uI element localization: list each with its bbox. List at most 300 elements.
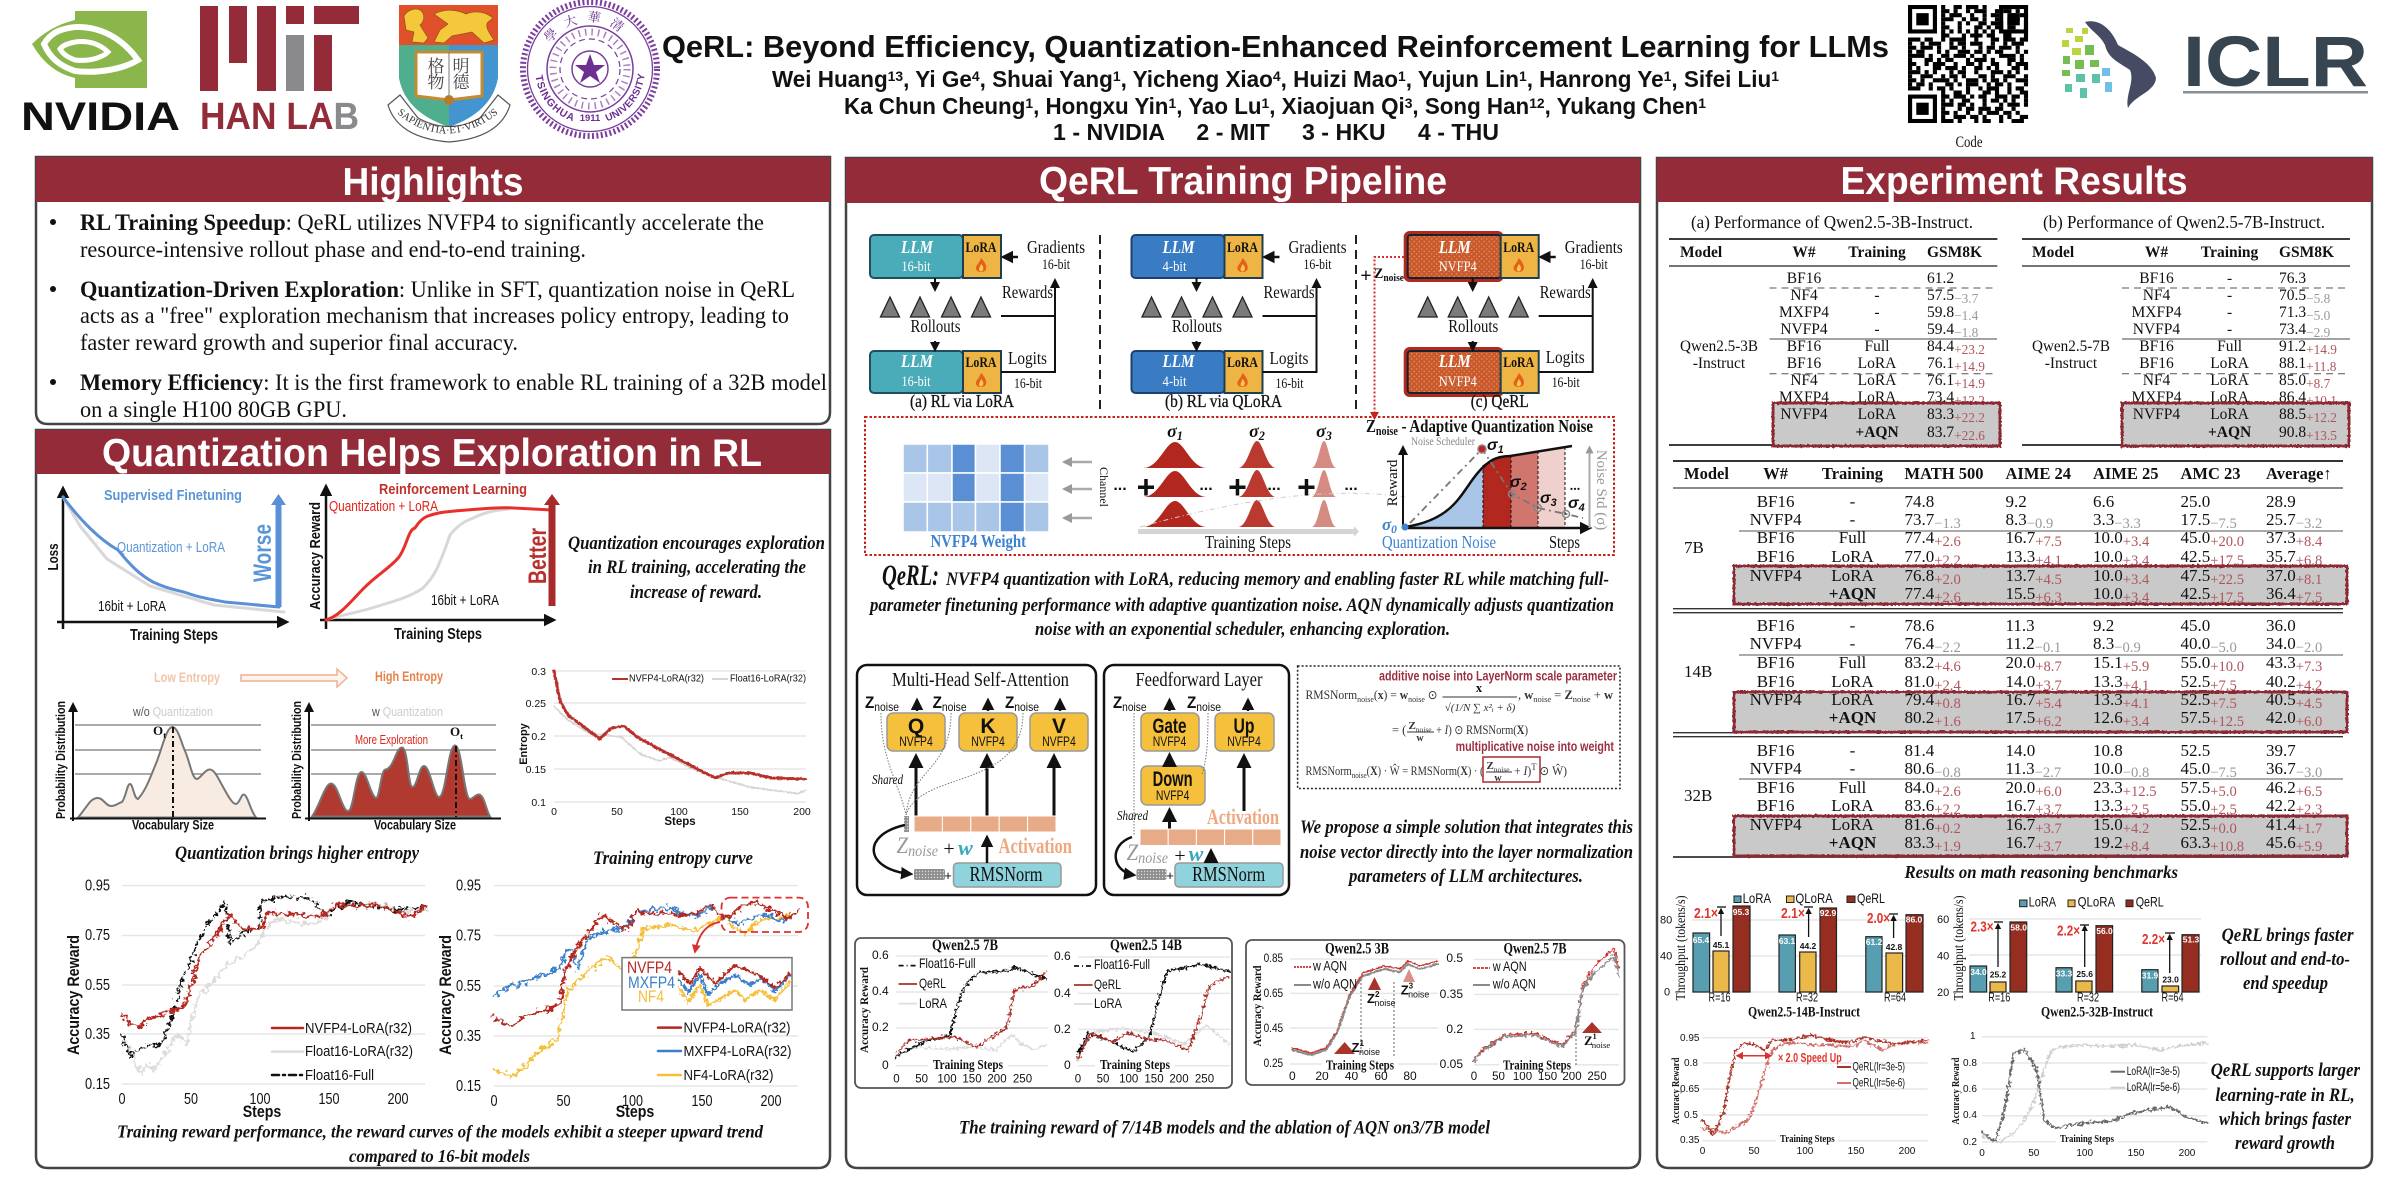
group: 7B rows: 13.7 bbox=[2006, 566, 2036, 585]
chart: Qwen2.5 14B: 150 bbox=[1144, 1074, 1164, 1086]
chart: QeRL learning rate: 0 bbox=[1700, 1146, 1706, 1157]
bar chart: Qwen2.5-14B throughput: 63.1 bbox=[1779, 936, 1796, 946]
diagram: feedforward layer: Znoise bbox=[1113, 693, 1146, 714]
group: 7B rows: +7.5 bbox=[2296, 590, 2322, 606]
diagram: RL via QLoRA: 4-bit bbox=[1162, 374, 1186, 390]
group: 32B rows: 36.7 bbox=[2266, 759, 2296, 778]
group: 7B rows: BF16 bbox=[1757, 492, 1794, 511]
text: we propose: parameters of LLM architectures. bbox=[1347, 867, 1583, 887]
gaussians: sigma distributions: σ1 bbox=[1167, 421, 1183, 443]
group: 32B rows: +3.7 bbox=[2035, 839, 2062, 855]
diagram: multi-head self-attention: + bbox=[943, 838, 955, 860]
chart: high entropy distribution: Probability Distribution bbox=[289, 701, 304, 819]
chart: Qwen2.5 14B: 100 bbox=[1119, 1074, 1138, 1086]
group: 7B rows: 35.7 bbox=[2266, 547, 2296, 566]
chart: high entropy distribution bbox=[289, 701, 501, 832]
logo: Tsinghua seal: 學大華清 bbox=[544, 10, 624, 41]
table a: Qwen2.5-3B: W# bbox=[1792, 244, 1816, 261]
table b: Qwen2.5-7B: 71.3 bbox=[2279, 304, 2306, 321]
group: 14B rows: BF16 bbox=[1757, 672, 1794, 691]
formula box: x bbox=[1476, 681, 1483, 695]
chart: accuracy reward NVFP4 vs float16: 0.95 bbox=[85, 878, 110, 894]
formula box: + I) ⊙ RMSNorm(X) bbox=[1436, 723, 1528, 737]
diagram: feedforward layer: NVFP4 bbox=[1156, 787, 1190, 803]
chart: high entropy distribution: w Quantization bbox=[371, 704, 443, 719]
chart: Qwen2.5 7B AQN: 0 bbox=[1471, 1071, 1477, 1083]
group: 7B rows: +3.4 bbox=[2123, 572, 2150, 588]
group: 7B rows: +2.6 bbox=[1934, 590, 1961, 606]
group: 32B rows: BF16 bbox=[1757, 796, 1794, 815]
group: 32B rows: 81.6 bbox=[1904, 815, 1934, 834]
group: 32B rows: −7.5 bbox=[2210, 765, 2237, 781]
chart: training entropy curve: 0 bbox=[551, 806, 557, 818]
diagram: multi-head self-attention: Znoise bbox=[865, 693, 899, 714]
group: 32B rows: +1.9 bbox=[1934, 839, 1961, 855]
table b: Qwen2.5-7B: +14.9 bbox=[2306, 342, 2337, 357]
caption: training reward performance bbox=[117, 1121, 764, 1166]
table a: Qwen2.5-3B: LoRA bbox=[1858, 372, 1897, 389]
chart: Qwen2.5 7B: 0 bbox=[893, 1074, 900, 1086]
chart: accuracy reward bit formats bbox=[436, 878, 808, 1121]
chart: Qwen2.5 7B: LoRA bbox=[919, 995, 948, 1011]
table b: Qwen2.5-7B: NF4 bbox=[2143, 372, 2171, 389]
chart: accuracy reward NVFP4 vs float16: Steps bbox=[243, 1102, 281, 1121]
table a: Qwen2.5-3B: 76.1 bbox=[1927, 372, 1954, 389]
group: 32B rows: Full bbox=[1839, 778, 1866, 797]
group: 7B rows: 36.4 bbox=[2266, 584, 2296, 603]
group: 7B rows: 76.8 bbox=[1904, 566, 1934, 585]
chart: accuracy reward bit formats: 0 bbox=[490, 1093, 498, 1110]
group: 14B rows: +4.1 bbox=[2123, 678, 2149, 694]
text: quantization encourages exploration: increase of reward. bbox=[630, 582, 762, 603]
group: 32B rows: 39.7 bbox=[2266, 741, 2296, 760]
formula box: RMSNormnoise(X) · Ŵ = RMSNorm(X) · ( bbox=[1306, 764, 1484, 780]
table a: Qwen2.5-3B: +14.9 bbox=[1954, 359, 1985, 374]
text: quantization encourages exploration: Quantization encourages exploration bbox=[568, 533, 825, 554]
diagram: RL via QLoRA: Rollouts bbox=[1172, 316, 1222, 336]
formula box: = ( bbox=[1392, 723, 1406, 737]
diagram: RL via LoRA: LoRA bbox=[966, 355, 997, 371]
chart: Qwen2.5 7B: 150 bbox=[962, 1074, 982, 1086]
bullet: quantization-driven exploration: faster reward growth and superior final accuracy. bbox=[80, 330, 518, 355]
group: 14B rows: 34.0 bbox=[2266, 634, 2296, 653]
diagram: RL via LoRA: 16-bit bbox=[1042, 257, 1070, 273]
group: 7B rows: 77.4 bbox=[1904, 528, 1935, 547]
gaussians: sigma distributions: ... bbox=[1199, 477, 1213, 494]
diagram: feedforward layer: + bbox=[1174, 845, 1186, 867]
group: 32B rows: 81.4 bbox=[1904, 741, 1935, 760]
diagram: QeRL: LoRA bbox=[1503, 355, 1535, 371]
group: 32B rows: - bbox=[1850, 741, 1856, 760]
group: 32B rows: +5.9 bbox=[2296, 839, 2322, 855]
chart: supervised finetuning loss: Training Steps bbox=[130, 627, 218, 644]
group: 7B rows: +8.4 bbox=[2296, 534, 2323, 550]
logo: NVIDIA bbox=[21, 11, 180, 139]
bar chart: Qwen2.5-32B throughput: 33.3 bbox=[2056, 969, 2073, 979]
chart: Qwen2.5 7B AQN: 50 bbox=[1492, 1071, 1505, 1083]
chart: training entropy curve: 150 bbox=[731, 806, 749, 818]
group: 14B rows: 40.2 bbox=[2266, 672, 2296, 691]
inset legend: NVFP4 bbox=[627, 958, 672, 977]
table b: Qwen2.5-7B: W# bbox=[2145, 244, 2168, 261]
group: 14B rows: 52.5 bbox=[2180, 690, 2210, 709]
label: plus Z noise: Znoise bbox=[1374, 266, 1404, 284]
table b: Qwen2.5-7B: 91.2 bbox=[2279, 338, 2306, 355]
table b: Qwen2.5-7B: -Instruct bbox=[2045, 355, 2098, 372]
chart: Qwen2.5 3B: 0.25 bbox=[1264, 1056, 1283, 1070]
table a: Qwen2.5-3B: −1.8 bbox=[1954, 325, 1979, 340]
bar chart: Qwen2.5-14B throughput: 2.0× bbox=[1867, 910, 1890, 927]
chart: Qwen2.5 7B AQN: Qwen2.5 7B bbox=[1504, 941, 1566, 958]
table a: Qwen2.5-3B: - bbox=[1874, 321, 1880, 338]
diagram: RL via QLoRA: 4-bit bbox=[1162, 259, 1186, 275]
group: 14B rows: 11.3 bbox=[2006, 616, 2035, 635]
diagram: feedforward layer: RMSNorm bbox=[1192, 862, 1265, 886]
chart: reinforcement learning reward: 16bit + LoRA bbox=[431, 592, 499, 609]
group: 7B rows: 10.0 bbox=[2093, 547, 2123, 566]
chart: training entropy curve: 100 bbox=[670, 806, 688, 818]
chart: accuracy reward NVFP4 vs float16: 0.55 bbox=[85, 977, 110, 994]
group: 14B rows: 11.2 bbox=[2006, 634, 2035, 653]
chart: accuracy reward bit formats: 0.35 bbox=[456, 1028, 481, 1045]
chart: LoRA learning rate: LoRA(lr=3e-5) bbox=[2127, 1064, 2180, 1078]
group: 14B rows: 43.3 bbox=[2266, 653, 2296, 672]
chart: LoRA learning rate: LoRA(lr=5e-6) bbox=[2127, 1080, 2180, 1094]
diagram: RL via LoRA: LLM bbox=[900, 351, 934, 371]
diagram: RL via LoRA: 16-bit bbox=[1014, 376, 1042, 392]
group: 32B rows: 84.0 bbox=[1904, 778, 1934, 797]
formula box bbox=[1298, 666, 1620, 788]
heading: QeRL training pipeline: QeRL Training Pipeline bbox=[1039, 160, 1447, 203]
diagram: RL via LoRA: 16-bit bbox=[902, 259, 930, 275]
group: 7B rows: +20.0 bbox=[2210, 534, 2244, 550]
bullet: memory efficiency: on a single H100 80GB GPU. bbox=[80, 397, 347, 422]
chart: accuracy reward NVFP4 vs float16: 0.75 bbox=[85, 927, 110, 944]
table a: Qwen2.5-3B: −3.7 bbox=[1954, 291, 1979, 306]
group: 7B rows: +AQN bbox=[1829, 584, 1877, 603]
chart: accuracy reward bit formats: MXFP4-LoRA(r32) bbox=[684, 1043, 792, 1060]
diagram: multi-head self-attention: Znoise bbox=[896, 833, 938, 860]
table b: Qwen2.5-7B: +11.8 bbox=[2306, 359, 2337, 374]
chart: training entropy curve: 0.2 bbox=[531, 731, 546, 743]
entropy arrow and labels bbox=[154, 668, 443, 687]
diagram: multi-head self-attention: K bbox=[980, 715, 996, 738]
chart: LoRA learning rate: 0.8 bbox=[1963, 1058, 1977, 1069]
heading: experiment results: Experiment Results bbox=[1840, 160, 2188, 203]
bar chart: Qwen2.5-14B throughput: 80 bbox=[1660, 914, 1672, 926]
chart: reinforcement learning reward: Quantization + LoRA bbox=[329, 498, 438, 515]
diagram: RL via LoRA: LoRA bbox=[966, 240, 997, 256]
chart: Qwen2.5 14B: Qwen2.5 14B bbox=[1110, 937, 1182, 954]
chart: noise scheduler: Quantization Noise bbox=[1382, 532, 1496, 552]
QR caption: Code bbox=[1956, 134, 1982, 151]
formula box: + I)T ⊙ Ŵ) bbox=[1514, 762, 1567, 778]
group: 14B rows: +2.4 bbox=[1934, 678, 1961, 694]
bar chart: Qwen2.5-32B throughput: 40 bbox=[1937, 950, 1949, 962]
chart: LoRA learning rate: 0.6 bbox=[1963, 1084, 1977, 1095]
group: 7B rows: NVFP4 bbox=[1750, 566, 1802, 585]
diagram: multi-head self-attention: Multi-Head Self-Attention bbox=[892, 669, 1069, 691]
chart: low entropy distribution: w/o Quantization bbox=[132, 704, 213, 719]
chart: Qwen2.5 14B: QeRL bbox=[1094, 976, 1121, 992]
chart: QeRL learning rate: × 2.0 Speed Up bbox=[1778, 1051, 1842, 1065]
bullet: RL training speedup: RL Training Speedup: QeRL utilizes NVFP4 to significantly accelerate the bbox=[80, 210, 764, 235]
group: 14B rows: +6.0 bbox=[2296, 714, 2322, 730]
chart: noise scheduler: σ1 bbox=[1487, 437, 1504, 456]
chart: noise scheduler: Noise Std (σ) bbox=[1593, 450, 1609, 530]
table b: Qwen2.5-7B: Qwen2.5-7B bbox=[2032, 338, 2110, 355]
chart: QeRL learning rate: QeRL(lr=5e-6) bbox=[1852, 1076, 1905, 1090]
inset legend: MXFP4 bbox=[628, 973, 675, 992]
gaussians: sigma distributions: + bbox=[1137, 469, 1155, 505]
group: 7B rows: 7B bbox=[1684, 538, 1704, 557]
highlight: NVFP4 7B: +AQN bbox=[2208, 424, 2251, 441]
bar chart: Qwen2.5-32B throughput: R=64 bbox=[2162, 991, 2184, 1005]
chart: Qwen2.5 14B: 0.2 bbox=[1054, 1022, 1071, 1036]
diagram: QeRL: (c) QeRL bbox=[1471, 391, 1529, 412]
group: 32B rows: −2.7 bbox=[2035, 765, 2061, 781]
chart: LoRA learning rate bbox=[1951, 1031, 2207, 1159]
chart: LoRA learning rate: Accuracy Reward bbox=[1951, 1057, 1962, 1124]
chart: Qwen2.5 3B: 0 bbox=[1289, 1069, 1296, 1083]
text: quantization encourages exploration bbox=[568, 533, 825, 603]
group: 32B rows: +10.8 bbox=[2210, 839, 2244, 855]
chart: Qwen2.5 7B: QeRL bbox=[919, 975, 946, 991]
bullet: RL training speedup bbox=[50, 210, 764, 262]
group: 32B rows: 52.5 bbox=[2180, 815, 2210, 834]
bullet: memory efficiency: Memory Efficiency: It is the first framework to enable RL training of a 32B model bbox=[80, 370, 827, 395]
chart: Qwen2.5 7B: 0.6 bbox=[872, 948, 889, 962]
highlight: NVFP4 3B: +AQN bbox=[1855, 424, 1899, 441]
chart: Qwen2.5 7B AQN: 0.35 bbox=[1440, 987, 1463, 1001]
group: 32B rows: −0.8 bbox=[1934, 765, 1961, 781]
bar chart: Qwen2.5-14B throughput: 2.1× bbox=[1694, 905, 1718, 922]
chart: Qwen2.5 3B: 0.45 bbox=[1264, 1021, 1283, 1035]
chart: Qwen2.5 3B: Z2 noise bbox=[1367, 990, 1396, 1008]
table a: Qwen2.5-3B: GSM8K bbox=[1927, 244, 1982, 261]
diagram: RL via QLoRA: (b) RL via QLoRA bbox=[1165, 391, 1282, 412]
chart: LoRA learning rate: 100 bbox=[2076, 1148, 2093, 1159]
chart: noise scheduler bbox=[1366, 416, 1609, 552]
bar chart: Qwen2.5-32B throughput: Qwen2.5-32B-Instruct bbox=[2041, 1005, 2153, 1021]
diagram: RL via QLoRA: Rewards bbox=[1264, 282, 1314, 302]
group: 32B rows: 13.3 bbox=[2093, 796, 2123, 815]
group: 7B rows: +3.4 bbox=[2123, 590, 2150, 606]
table a: Qwen2.5-3B: BF16 bbox=[1787, 270, 1821, 287]
chart: accuracy reward NVFP4 vs float16: 200 bbox=[388, 1091, 409, 1108]
text: faster rollout: end speedup bbox=[2243, 974, 2328, 994]
highlight: NVFP4 3B: +22.2 bbox=[1954, 410, 1985, 425]
arrows: channel bbox=[1064, 462, 1111, 518]
table b: Qwen2.5-7B: BF16 bbox=[2139, 270, 2174, 287]
chart: Qwen2.5 7B AQN: Z1 noise bbox=[1584, 1032, 1610, 1050]
group: 32B rows: +5.0 bbox=[2210, 784, 2237, 800]
table a: Qwen2.5-3B: 84.4 bbox=[1927, 338, 1954, 355]
group: 7B rows: 25.0 bbox=[2180, 492, 2210, 511]
chart: reinforcement learning reward: Better bbox=[524, 528, 552, 584]
group: 32B rows: +2.3 bbox=[2296, 802, 2322, 818]
highlight: NVFP4 3B: +22.6 bbox=[1954, 428, 1985, 443]
group: 14B rows: Full bbox=[1839, 653, 1866, 672]
table b: Qwen2.5-7B: Model bbox=[2032, 244, 2075, 261]
logo: Tsinghua seal: TSINGHUA bbox=[536, 74, 573, 122]
chart: accuracy reward bit formats: 0.95 bbox=[456, 878, 481, 894]
table: math benchmarks: Training bbox=[1822, 464, 1884, 483]
gaussians: sigma distributions: ... bbox=[1113, 477, 1127, 494]
group: 7B rows: - bbox=[1850, 492, 1856, 511]
group: 7B rows: +7.5 bbox=[2035, 534, 2062, 550]
group: 32B rows: 46.2 bbox=[2266, 778, 2296, 797]
group: 7B rows: 42.5 bbox=[2180, 584, 2210, 603]
table a: Qwen2.5-3B: 73.4 bbox=[1927, 389, 1954, 406]
group: 14B rows: 13.3 bbox=[2093, 690, 2123, 709]
group: 32B rows: 10.8 bbox=[2093, 741, 2123, 760]
diagram: RL via LoRA: Gradients bbox=[1027, 237, 1085, 257]
chart: high entropy distribution: Vocabulary Size bbox=[374, 818, 456, 832]
chart: Qwen2.5 7B AQN: 200 bbox=[1562, 1071, 1582, 1083]
formula box: Znoise bbox=[1408, 720, 1432, 734]
chart: QeRL learning rate: Accuracy Reward bbox=[1671, 1057, 1682, 1124]
formula box: multiplicative noise into weight bbox=[1456, 739, 1614, 754]
highlight: NVFP4 3B: NVFP4 bbox=[1780, 406, 1828, 423]
diagram: QeRL: 16-bit bbox=[1552, 375, 1580, 391]
chart: accuracy reward bit formats: 200 bbox=[760, 1093, 782, 1110]
group: 14B rows: 9.2 bbox=[2093, 616, 2114, 635]
group: 32B rows: 15.0 bbox=[2093, 815, 2123, 834]
chart: accuracy reward NVFP4 vs float16: NVFP4-LoRA(r32) bbox=[305, 1020, 412, 1037]
group: 7B rows: 77.4 bbox=[1904, 584, 1935, 603]
group: 7B rows: 77.0 bbox=[1904, 547, 1934, 566]
table: math benchmarks: AIME 24 bbox=[2006, 464, 2071, 483]
chart: high entropy distribution: More Exploration bbox=[355, 732, 428, 747]
diagram: feedforward layer: + bbox=[1166, 868, 1174, 883]
chart: Qwen2.5 3B: Z1 noise bbox=[1352, 1039, 1380, 1057]
bar chart: Qwen2.5-32B throughput: 51.3 bbox=[2183, 935, 2200, 945]
diagram: RL via QLoRA: LoRA bbox=[1227, 240, 1258, 256]
inset legend: NF4 bbox=[638, 987, 664, 1006]
diagram: feedforward layer: Feedforward Layer bbox=[1136, 669, 1263, 691]
chart: supervised finetuning loss: Loss bbox=[45, 544, 62, 570]
bar chart: Qwen2.5-14B throughput: R=32 bbox=[1796, 991, 1818, 1005]
gaussians: sigma distributions: σ3 bbox=[1316, 421, 1332, 443]
chart: training entropy curve: 0.25 bbox=[526, 698, 546, 710]
diagram: QeRL: Gradients bbox=[1565, 237, 1623, 257]
table b: Qwen2.5-7B: +8.7 bbox=[2306, 376, 2331, 391]
diagram: feedforward layer: Activation bbox=[1207, 804, 1279, 829]
group: 32B rows: 45.0 bbox=[2180, 759, 2210, 778]
chart: Qwen2.5 14B: 0.4 bbox=[1054, 986, 1071, 1000]
chart: QeRL learning rate: 0.65 bbox=[1680, 1084, 1700, 1095]
group: 14B rows: +8.7 bbox=[2035, 659, 2062, 675]
table a: Qwen2.5-3B: Qwen2.5-3B bbox=[1680, 338, 1758, 355]
group: 32B rows: +3.7 bbox=[2035, 802, 2062, 818]
group: 32B rows: 83.6 bbox=[1904, 796, 1934, 815]
chart: accuracy reward bit formats: Accuracy Reward bbox=[436, 935, 455, 1055]
table b: Qwen2.5-7B: MXFP4 bbox=[2132, 389, 2182, 406]
authors bbox=[772, 66, 1779, 145]
authors: 1 - NVIDIA 2 - MIT 3 - HKU 4 - THU bbox=[1053, 119, 1499, 145]
table b: Qwen2.5-7B: LoRA bbox=[2210, 355, 2250, 372]
table a: Qwen2.5-3B: NF4 bbox=[1790, 372, 1818, 389]
bar chart: Qwen2.5-14B throughput: Throughput (tokens/s) bbox=[1674, 895, 1689, 1000]
chart: LoRA learning rate: 0.2 bbox=[1963, 1137, 1977, 1148]
formula box: Znoise bbox=[1486, 760, 1510, 774]
chart: accuracy reward bit formats: NF4-LoRA(r32) bbox=[684, 1067, 774, 1084]
group: 7B rows: +4.5 bbox=[2035, 572, 2062, 588]
text: QeRL description: noise with an exponential scheduler, enhancing exploration. bbox=[1035, 620, 1450, 640]
group: 32B rows: 41.4 bbox=[2266, 815, 2296, 834]
group: 14B rows: +4.2 bbox=[2296, 678, 2322, 694]
group: 32B rows: 57.5 bbox=[2180, 778, 2210, 797]
text: larger learning rate: learning-rate in RL, bbox=[2215, 1086, 2355, 1106]
group: 7B rows: 8.3 bbox=[2006, 510, 2027, 529]
group: 14B rows: LoRA bbox=[1831, 690, 1874, 709]
group: 7B rows: 3.3 bbox=[2093, 510, 2114, 529]
chart: LoRA learning rate: 150 bbox=[2128, 1148, 2145, 1159]
chart: noise scheduler: Noise Scheduler bbox=[1411, 434, 1475, 448]
group: 14B rows: 12.6 bbox=[2093, 708, 2123, 727]
chart: noise scheduler: Reward bbox=[1385, 459, 1401, 506]
group: 32B rows: - bbox=[1850, 759, 1856, 778]
diagram: multi-head self-attention: V bbox=[1052, 715, 1066, 738]
group: 32B rows: 32B bbox=[1684, 786, 1712, 805]
text: QeRL description: NVFP4 quantization with LoRA, reducing memory and enabling faster RL while matching full- bbox=[945, 570, 1609, 590]
bar chart: Qwen2.5-32B throughput: R=32 bbox=[2077, 991, 2099, 1005]
text: larger learning rate: which brings faster bbox=[2219, 1110, 2352, 1130]
table b: Qwen2.5-7B: 73.4 bbox=[2279, 321, 2306, 338]
diagram: feedforward layer: Znoise bbox=[1127, 840, 1168, 867]
table b: Qwen2.5-7B: 88.1 bbox=[2279, 355, 2306, 372]
group: 32B rows: 42.2 bbox=[2266, 796, 2296, 815]
logo: ICLR bbox=[2062, 21, 2368, 108]
group: 14B rows: 36.0 bbox=[2266, 616, 2296, 635]
diagram: QeRL: 16-bit bbox=[1580, 257, 1608, 273]
diagram: feedforward layer: Znoise bbox=[1187, 693, 1221, 714]
group: 7B rows: +6.3 bbox=[2035, 590, 2062, 606]
group: 32B rows: 11.3 bbox=[2006, 759, 2035, 778]
diagram: multi-head self-attention: Znoise bbox=[933, 693, 967, 714]
chart: accuracy reward bit formats: Steps bbox=[616, 1102, 654, 1121]
table a: Qwen2.5-3B: Model bbox=[1680, 244, 1723, 261]
text: faster rollout: QeRL brings faster bbox=[2222, 926, 2354, 946]
group: 14B rows: 76.4 bbox=[1904, 634, 1935, 653]
chart: Qwen2.5 7B: 250 bbox=[1013, 1074, 1032, 1086]
group: 14B rows: 17.5 bbox=[2006, 708, 2035, 727]
group: 7B rows: +3.4 bbox=[2123, 553, 2150, 569]
group: 32B rows bbox=[1684, 741, 2347, 856]
table a: Qwen2.5-3B: NF4 bbox=[1790, 287, 1818, 304]
bar chart: Qwen2.5-32B throughput: 25.2 bbox=[1990, 970, 2007, 980]
diagram: RL via QLoRA: 16-bit bbox=[1276, 376, 1304, 392]
panel: training reward 7B and 14B bbox=[855, 937, 1232, 1088]
formula box: √(1/N ∑ x²ᵢ + δ) bbox=[1445, 702, 1516, 714]
chart: Qwen2.5 14B: Training Steps bbox=[1100, 1057, 1170, 1072]
chart: supervised finetuning loss: 16bit + LoRA bbox=[98, 598, 166, 615]
table a: Qwen2.5-3B: NVFP4 bbox=[1780, 321, 1828, 338]
caption: training reward performance: Training reward performance, the reward curves of the models exhibit a steeper upward trend bbox=[117, 1121, 764, 1141]
authors: Wei Huang13, Yi Ge4, Shuai Yang1, Yicheng Xiao4, Huizi Mao1, Yujun Lin1, Hanrong Ye1, Sifei Liu1 bbox=[772, 66, 1779, 92]
group: 14B rows: +4.1 bbox=[2123, 696, 2149, 712]
logo: Tsinghua seal: UNIVERSITY bbox=[605, 74, 644, 120]
group: 14B rows: 45.0 bbox=[2180, 616, 2210, 635]
highlight: NVFP4 7B bbox=[2122, 403, 2349, 446]
chart: accuracy reward NVFP4 vs float16: 100 bbox=[250, 1091, 271, 1108]
group: 32B rows: +6.5 bbox=[2296, 784, 2322, 800]
chart: accuracy reward NVFP4 vs float16: 150 bbox=[318, 1091, 340, 1108]
chart: Qwen2.5 7B AQN: 250 bbox=[1587, 1071, 1607, 1083]
chart: Qwen2.5 7B bbox=[859, 937, 1048, 1086]
chart: Qwen2.5 7B: Accuracy Reward bbox=[859, 966, 871, 1053]
